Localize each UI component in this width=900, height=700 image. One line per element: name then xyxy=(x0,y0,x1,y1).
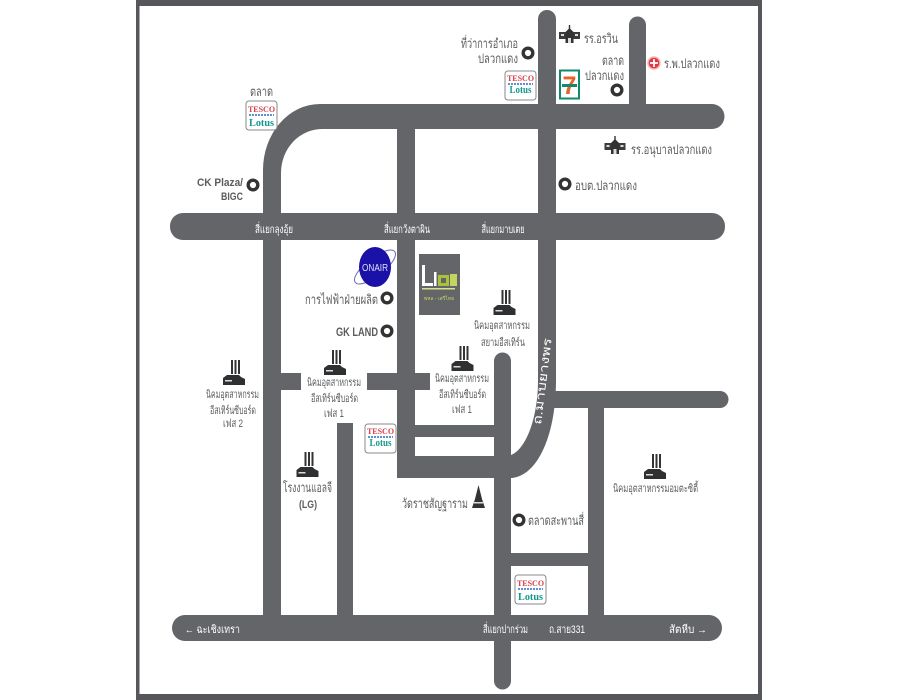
factory: Eastern Seaboard phase 2: เฟส 2 xyxy=(223,418,243,430)
road labels: สัตหีบ → xyxy=(669,623,707,636)
logo: Tesco Lotus Express centre: TESCO xyxy=(367,427,394,436)
factory: Eastern Seaboard phase 1 east: อีสเทิร์นซีบอร์ด xyxy=(439,388,486,401)
logo: Tesco Lotus bottom: TESCO xyxy=(517,579,544,588)
factory: LG xyxy=(283,452,332,511)
factory: Eastern Seaboard phase 1 west xyxy=(307,350,361,420)
label: temple: วัดราชสัญฐาราม xyxy=(402,496,468,512)
logo: 7-Eleven: 7 xyxy=(563,72,576,100)
logo: Tesco Lotus Express centre xyxy=(365,424,396,453)
logo: ONAIR: ONAIR xyxy=(362,263,388,274)
logo: Tesco Lotus bottom: Lotus xyxy=(518,591,544,603)
factory: Eastern Seaboard phase 2: นิคมอุตสาหกรรม xyxy=(206,389,259,401)
factory: Eastern Seaboard phase 1 west: เฟส 1 xyxy=(324,408,344,420)
logo: ONAIR xyxy=(350,245,400,289)
marker: Pluak Daeng market: ปลวกแดง xyxy=(585,68,624,83)
factory: Eastern Seaboard phase 1 east xyxy=(435,346,489,416)
label: school Orawin xyxy=(559,25,618,46)
factory: Eastern Seaboard phase 1 east: นิคมอุตสาหกรรม xyxy=(435,373,489,385)
label: temple xyxy=(402,485,485,512)
factory: Eastern Seaboard phase 1 west: อีสเทิร์นซีบอร์ด xyxy=(311,392,358,405)
road labels: สี่แยกปากร่วม xyxy=(483,621,528,636)
label: kindergarten: รร.อนุบาลปลวกแดง xyxy=(631,142,712,158)
marker: Saphan Si market: ตลาดสะพานสี่ xyxy=(528,512,584,528)
page frame xyxy=(136,0,762,700)
factory: Siam Eastern xyxy=(474,290,530,349)
logo: Tesco Lotus top left: Lotus xyxy=(249,117,275,129)
factory: Siam Eastern: สยามอีสเทิร์น xyxy=(481,336,525,349)
marker: subdistrict office: อบต.ปลวกแดง xyxy=(575,178,637,193)
logo: 7-Eleven xyxy=(560,70,579,100)
factory: Eastern Seaboard phase 1 east: เฟส 1 xyxy=(452,404,472,416)
factory: Amata City: นิคมอุตสาหกรรมอมตะซิตี้ xyxy=(613,480,699,495)
road network xyxy=(170,10,728,690)
logo: Tesco Lotus top left: TESCO xyxy=(248,105,275,114)
label: kindergarten xyxy=(604,136,712,158)
logo: Tesco Lotus bottom xyxy=(515,575,546,604)
marker: district office: ปลวกแดง xyxy=(478,51,518,66)
marker: Saphan Si market xyxy=(514,512,584,528)
marker: CK Plaza xyxy=(197,177,258,203)
road labels: สี่แยกมาบเตย xyxy=(481,221,524,236)
logo: Tesco Lotus Express top: Lotus xyxy=(510,84,532,96)
marker: CK Plaza: BIGC xyxy=(221,191,243,203)
factory: Siam Eastern: นิคมอุตสาหกรรม xyxy=(474,320,530,332)
road labels xyxy=(185,221,707,636)
marker: GK Land: GK LAND xyxy=(336,325,378,339)
logo: Lio project xyxy=(419,254,460,315)
marker: Pluak Daeng market: ตลาด xyxy=(602,53,624,68)
label: Pluak Daeng hospital xyxy=(648,56,720,71)
marker: subdistrict office xyxy=(560,178,637,193)
factory: LG: โรงงานแอลจี xyxy=(283,480,332,495)
road labels: สี่แยกวังตาผิน xyxy=(384,221,430,236)
road labels: ถ.มาบยางพร xyxy=(530,337,555,425)
marker: electricity authority: การไฟฟ้าฝ่ายผลิต xyxy=(305,292,378,307)
road labels: ถ.สาย331 xyxy=(549,624,585,636)
logo: Tesco Lotus top left xyxy=(246,84,277,130)
logo: Tesco Lotus top left: ตลาด xyxy=(250,84,273,99)
factory: Eastern Seaboard phase 2 xyxy=(206,360,259,430)
marker: district office: ที่ว่าการอำเภอ xyxy=(461,35,518,51)
road labels: สี่แยกลุงอุ้ย xyxy=(255,221,293,236)
logo: Lio project: พหล - เสรีไทย xyxy=(424,295,454,302)
label: school Orawin: รร.อรวิน xyxy=(584,31,618,46)
factory: Eastern Seaboard phase 2: อีสเทิร์นซีบอร์ด xyxy=(210,404,256,417)
marker: district office xyxy=(461,35,533,66)
logo: Tesco Lotus Express centre: Lotus xyxy=(370,437,392,449)
factory: Eastern Seaboard phase 1 west: นิคมอุตสาหกรรม xyxy=(307,377,361,389)
label: Pluak Daeng hospital: ร.พ.ปลวกแดง xyxy=(664,56,720,71)
factory: Amata City xyxy=(613,454,699,495)
logo: Tesco Lotus Express top xyxy=(505,71,536,100)
marker: Pluak Daeng market xyxy=(585,53,624,95)
marker: CK Plaza: CK Plaza/ xyxy=(197,177,243,189)
road labels: ← ฉะเชิงเทรา xyxy=(185,624,240,636)
factory: LG: (LG) xyxy=(299,499,317,511)
logo: Tesco Lotus Express top: TESCO xyxy=(507,74,534,83)
